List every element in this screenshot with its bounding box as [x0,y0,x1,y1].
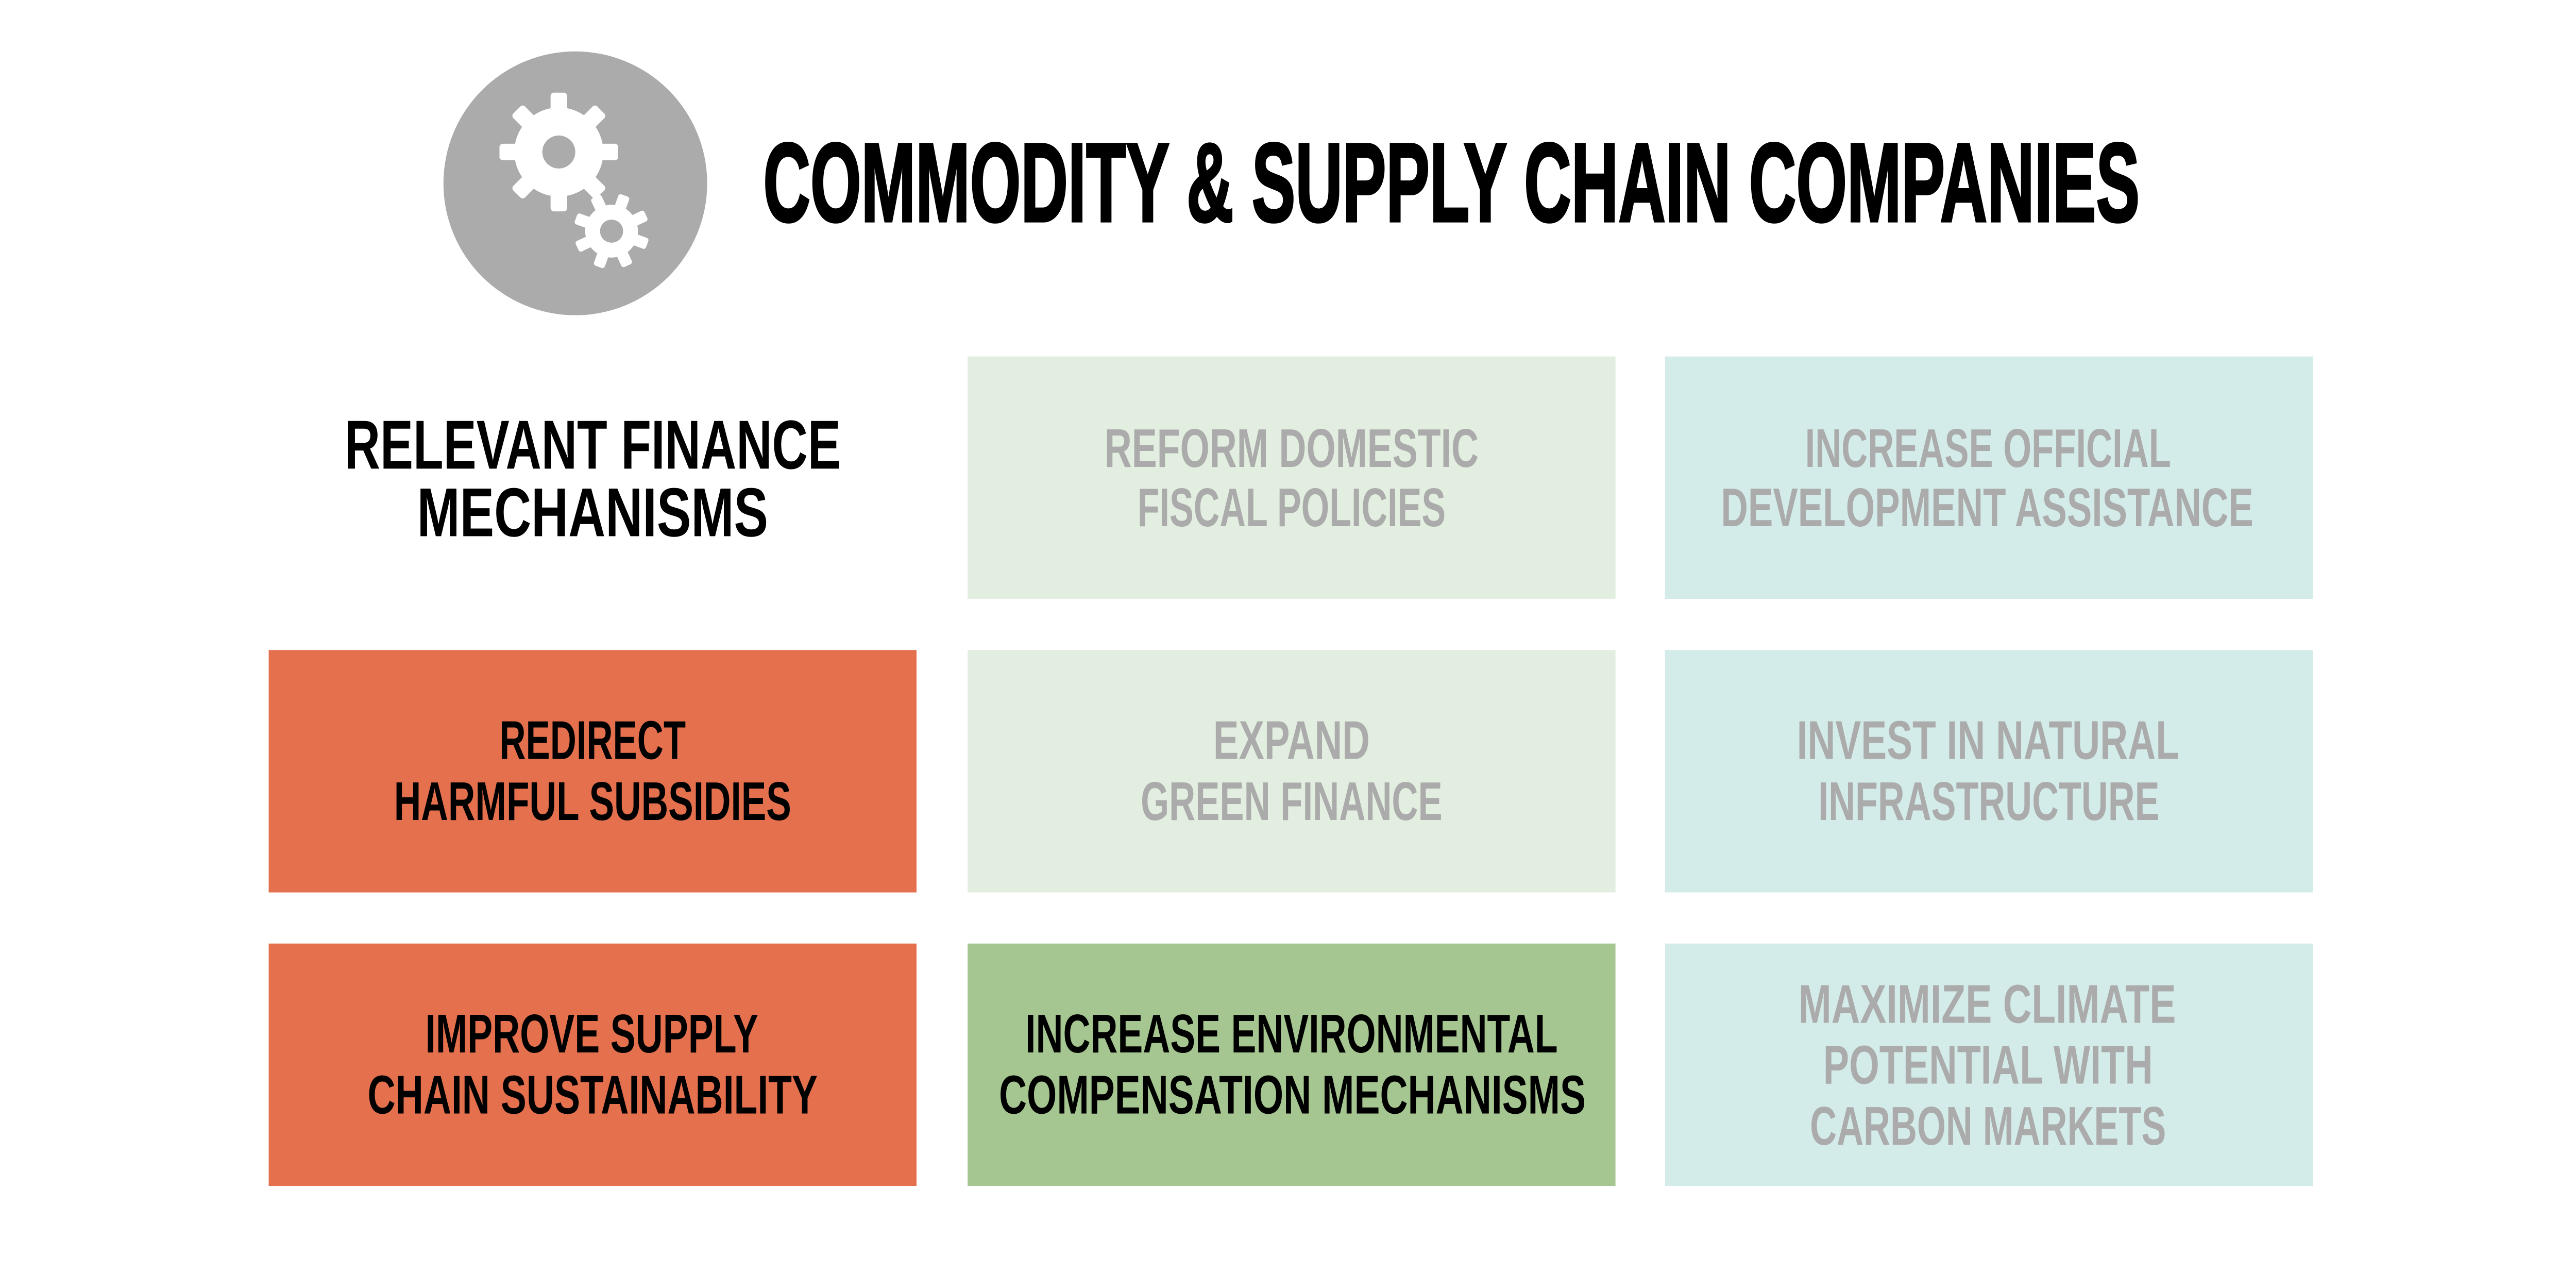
panel: redirect harmful subsidies: HARMFUL SUBSIDIES [394,771,791,832]
panel: reform domestic fiscal policies: FISCAL POLICIES [1138,477,1446,538]
panel: redirect harmful subsidies: REDIRECT [499,710,686,771]
heading: relevant finance mechanisms: RELEVANT FINANCE [345,406,841,483]
heading: relevant finance mechanisms: MECHANISMS [417,474,768,551]
panel: redirect harmful subsidies [269,650,917,893]
panel: maximize climate potential with carbon markets [1665,944,2313,1186]
panel: increase environmental compensation mechanisms [968,944,1616,1186]
panel: maximize climate potential with carbon markets: MAXIMIZE CLIMATE [1799,974,2176,1034]
panel: increase environmental compensation mechanisms: COMPENSATION MECHANISMS [999,1064,1586,1125]
panel: invest in natural infrastructure: INVEST IN NATURAL [1797,710,2179,771]
panel: improve supply chain sustainability: CHAIN SUSTAINABILITY [368,1064,818,1125]
panel: increase official development assistance: DEVELOPMENT ASSISTANCE [1721,477,2253,538]
panel: increase environmental compensation mechanisms: INCREASE ENVIRONMENTAL [1025,1003,1558,1064]
panel: invest in natural infrastructure [1665,650,2313,893]
panel: increase official development assistance [1665,357,2313,599]
panel: improve supply chain sustainability: IMPROVE SUPPLY [426,1003,758,1064]
panel: expand green finance [968,650,1616,893]
panel: invest in natural infrastructure: INFRASTRUCTURE [1818,771,2159,832]
panel: expand green finance: GREEN FINANCE [1141,771,1443,832]
panel: expand green finance: EXPAND [1213,710,1370,771]
panel: maximize climate potential with carbon markets: CARBON MARKETS [1810,1096,2166,1157]
panel: improve supply chain sustainability [269,944,917,1186]
panel: increase official development assistance: INCREASE OFFICIAL [1805,418,2171,479]
panel: reform domestic fiscal policies: REFORM DOMESTIC [1105,418,1479,479]
panel: maximize climate potential with carbon markets: POTENTIAL WITH [1823,1035,2153,1096]
heading: relevant finance mechanisms [345,406,841,551]
panel: reform domestic fiscal policies [968,357,1616,599]
icon: gears in circle [444,52,707,315]
